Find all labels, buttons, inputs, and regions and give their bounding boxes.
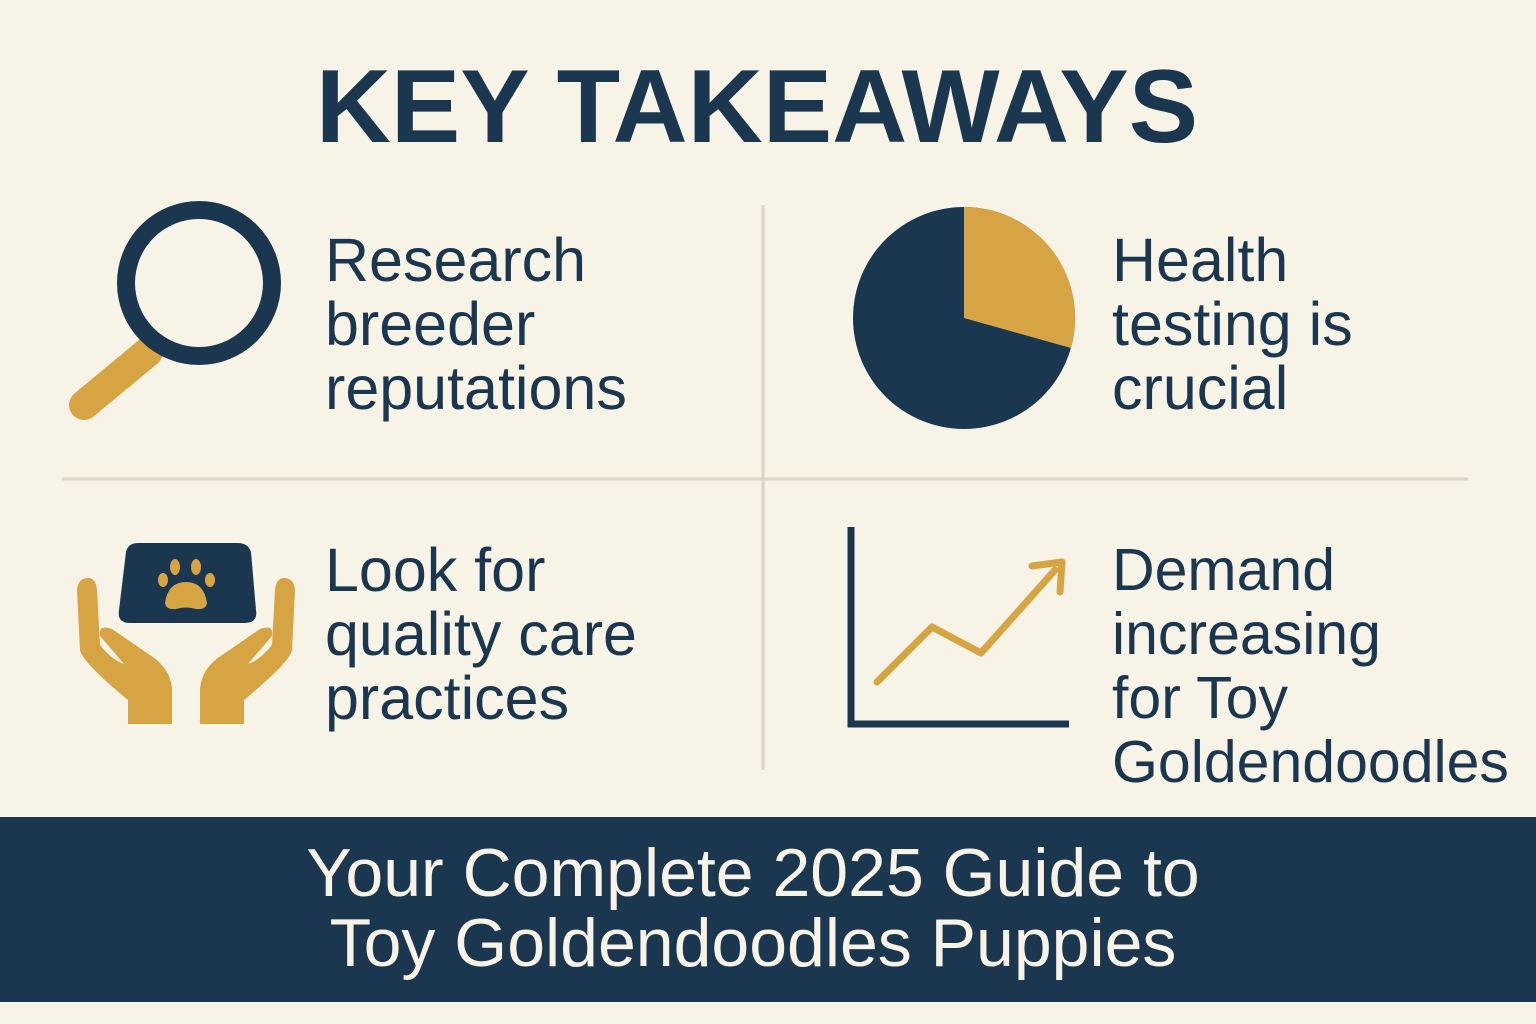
text: care xyxy=(325,536,637,732)
text: health: crucial xyxy=(1112,354,1288,422)
title: KEY TAKEAWAYS xyxy=(316,49,1198,165)
text: demand: increasing xyxy=(1112,601,1381,667)
footer banner xyxy=(0,817,1536,1002)
icon: hands with bowl xyxy=(77,543,295,724)
text: demand: Demand xyxy=(1112,537,1335,603)
text: health xyxy=(1112,226,1353,422)
text: demand xyxy=(1112,537,1509,795)
icon: magnifier xyxy=(84,210,272,405)
text: health: Health xyxy=(1112,226,1288,294)
footer banner: Toy Goldendoodles Puppies xyxy=(330,905,1176,981)
icon: pie chart xyxy=(853,207,1075,429)
text: research xyxy=(325,226,627,422)
text: care: practices xyxy=(325,664,569,732)
text: care: Look for xyxy=(325,536,545,604)
text: care: quality care xyxy=(325,600,637,668)
text: research: reputations xyxy=(325,354,627,422)
text: demand: Goldendoodles xyxy=(1112,729,1509,795)
footer banner: Your Complete 2025 Guide to xyxy=(306,835,1200,911)
text: demand: for Toy xyxy=(1112,665,1288,731)
icon: line chart xyxy=(851,527,1069,724)
text: research: breeder xyxy=(325,290,535,358)
text: health: testing is xyxy=(1112,290,1353,358)
text: research: Research xyxy=(325,226,586,294)
